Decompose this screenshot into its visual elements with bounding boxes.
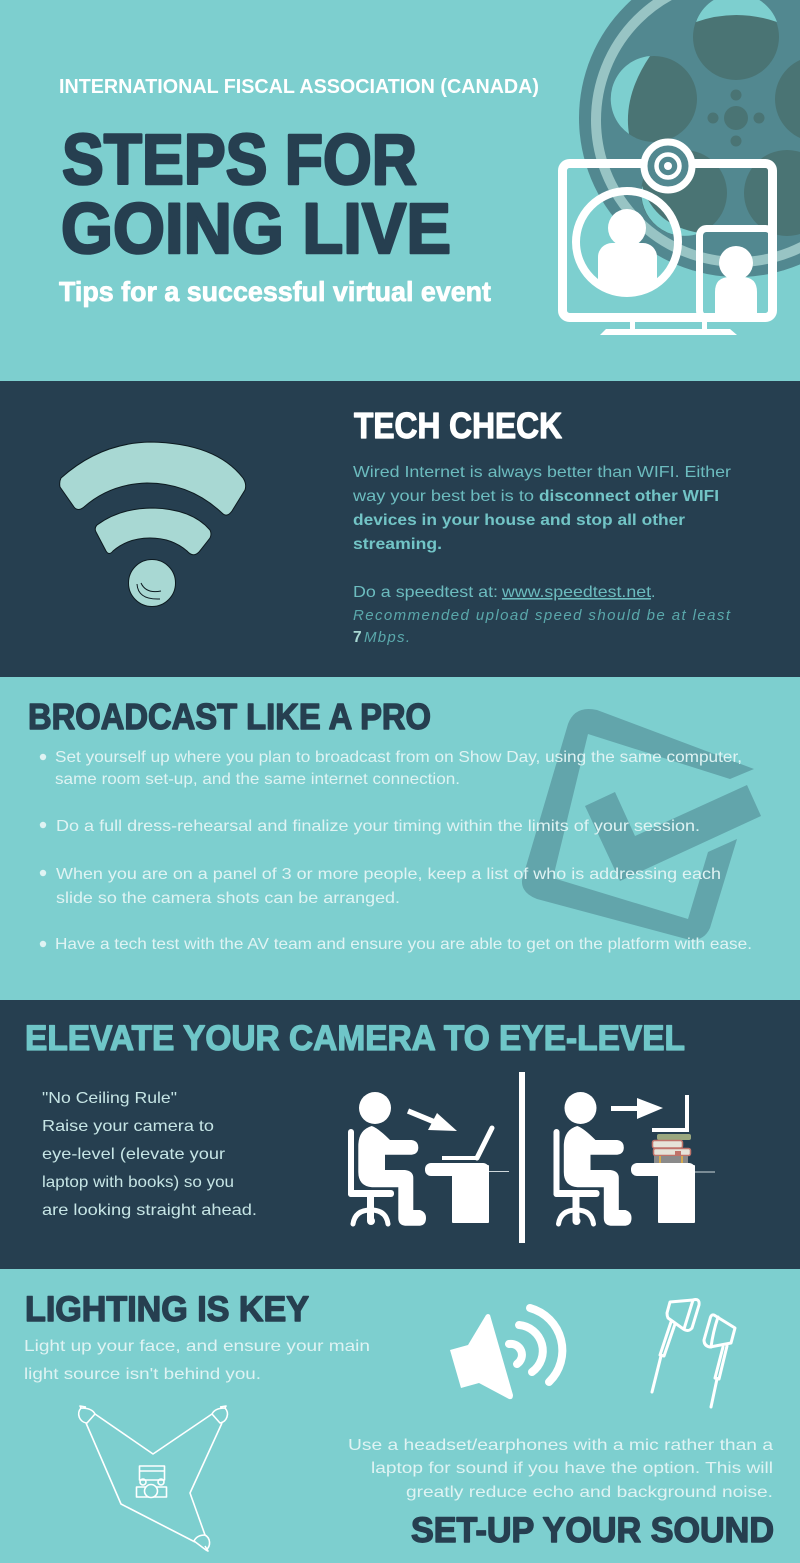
icon: speaker bbox=[450, 1308, 562, 1399]
organisation name: INTERNATIONAL FISCAL ASSOCIATION (CANADA) bbox=[59, 76, 539, 98]
text: sound advice bbox=[348, 1437, 773, 1501]
icon: wifi bbox=[60, 442, 246, 606]
text: internet advice: Wired Internet is always better than WIFI. Either bbox=[353, 464, 732, 481]
text: sound advice: Use a headset/earphones with a mic rather than a bbox=[348, 1437, 773, 1454]
diagram: three-point lighting bbox=[79, 1406, 227, 1551]
text: lighting advice bbox=[24, 1338, 370, 1383]
list: broadcast tips bbox=[40, 749, 752, 953]
text: speedtest: Mbps. bbox=[364, 629, 410, 646]
text: internet advice: disconnect other WIFI bbox=[539, 488, 719, 505]
text: internet advice: streaming. bbox=[353, 536, 442, 553]
panel: header bbox=[59, 0, 800, 335]
panel: broadcast like a pro bbox=[28, 696, 761, 953]
list: broadcast tips: When you are on a panel of 3 or more people, keep a list of who is addressing each bbox=[56, 866, 721, 883]
text: no ceiling rule: are looking straight ahead. bbox=[42, 1202, 257, 1219]
icon: checkbox watermark bbox=[522, 709, 761, 940]
icon: video call monitor bbox=[562, 142, 772, 335]
text: lighting advice: light source isn't behind you. bbox=[24, 1366, 261, 1383]
text: speedtest bbox=[353, 584, 731, 646]
heading: sound: SET-UP YOUR SOUND bbox=[411, 1511, 774, 1550]
text: internet advice bbox=[352, 464, 732, 553]
title: GOING LIVE bbox=[61, 190, 451, 269]
panel: lighting and sound bbox=[24, 1290, 774, 1551]
list: broadcast tips: Do a full dress-rehearsal and finalize your timing within the limits of your session. bbox=[56, 818, 700, 835]
title: STEPS FOR bbox=[62, 121, 417, 200]
list: broadcast tips: same room set-up, and the same internet connection. bbox=[55, 771, 460, 788]
heading: tech check: TECH CHECK bbox=[354, 405, 562, 446]
text: no ceiling rule: Raise your camera to bbox=[42, 1118, 214, 1135]
text: no ceiling rule: "No Ceiling Rule" bbox=[42, 1090, 177, 1107]
text: no ceiling rule bbox=[42, 1090, 257, 1219]
heading: lighting: LIGHTING IS KEY bbox=[25, 1290, 309, 1329]
divider bar bbox=[519, 1072, 525, 1243]
text: sound advice: greatly reduce echo and background noise. bbox=[406, 1484, 773, 1501]
heading: broadcast: BROADCAST LIKE A PRO bbox=[28, 696, 431, 737]
text: no ceiling rule: eye-level (elevate your bbox=[42, 1146, 226, 1163]
text: sound advice: laptop for sound if you have the option. This will bbox=[371, 1460, 773, 1477]
list: broadcast tips: Have a tech test with the AV team and ensure you are able to get on the platform with ease. bbox=[55, 936, 752, 953]
text: speedtest: 7 bbox=[353, 629, 362, 646]
text: internet advice: devices in your house and stop all other bbox=[353, 512, 685, 529]
list: broadcast tips: Set yourself up where you plan to broadcast from on Show Day, using the same computer, bbox=[55, 749, 742, 766]
text: lighting advice: Light up your face, and ensure your main bbox=[24, 1338, 370, 1355]
text: speedtest: Recommended upload speed should be at least bbox=[353, 607, 731, 624]
heading: elevate: ELEVATE YOUR CAMERA TO EYE-LEVEL bbox=[25, 1019, 685, 1058]
title bbox=[61, 121, 451, 269]
text: speedtest: www.speedtest.net bbox=[501, 584, 652, 601]
icon: film reel bbox=[579, 0, 800, 277]
text: speedtest: . bbox=[651, 584, 655, 601]
subtitle: Tips for a successful virtual event bbox=[59, 276, 491, 307]
panel: tech check bbox=[0, 381, 800, 677]
text: internet advice: way your best bet is to bbox=[352, 488, 534, 505]
icon: seated person, laptop too low bbox=[348, 1092, 509, 1226]
text: speedtest: Do a speedtest at: bbox=[353, 584, 498, 601]
panel: elevate your camera bbox=[0, 1000, 800, 1269]
icon: seated person, laptop on books bbox=[554, 1092, 715, 1226]
icon: earphones bbox=[652, 1300, 735, 1407]
text: no ceiling rule: laptop with books) so you bbox=[42, 1174, 234, 1191]
list: broadcast tips: slide so the camera shots can be arranged. bbox=[56, 890, 400, 907]
